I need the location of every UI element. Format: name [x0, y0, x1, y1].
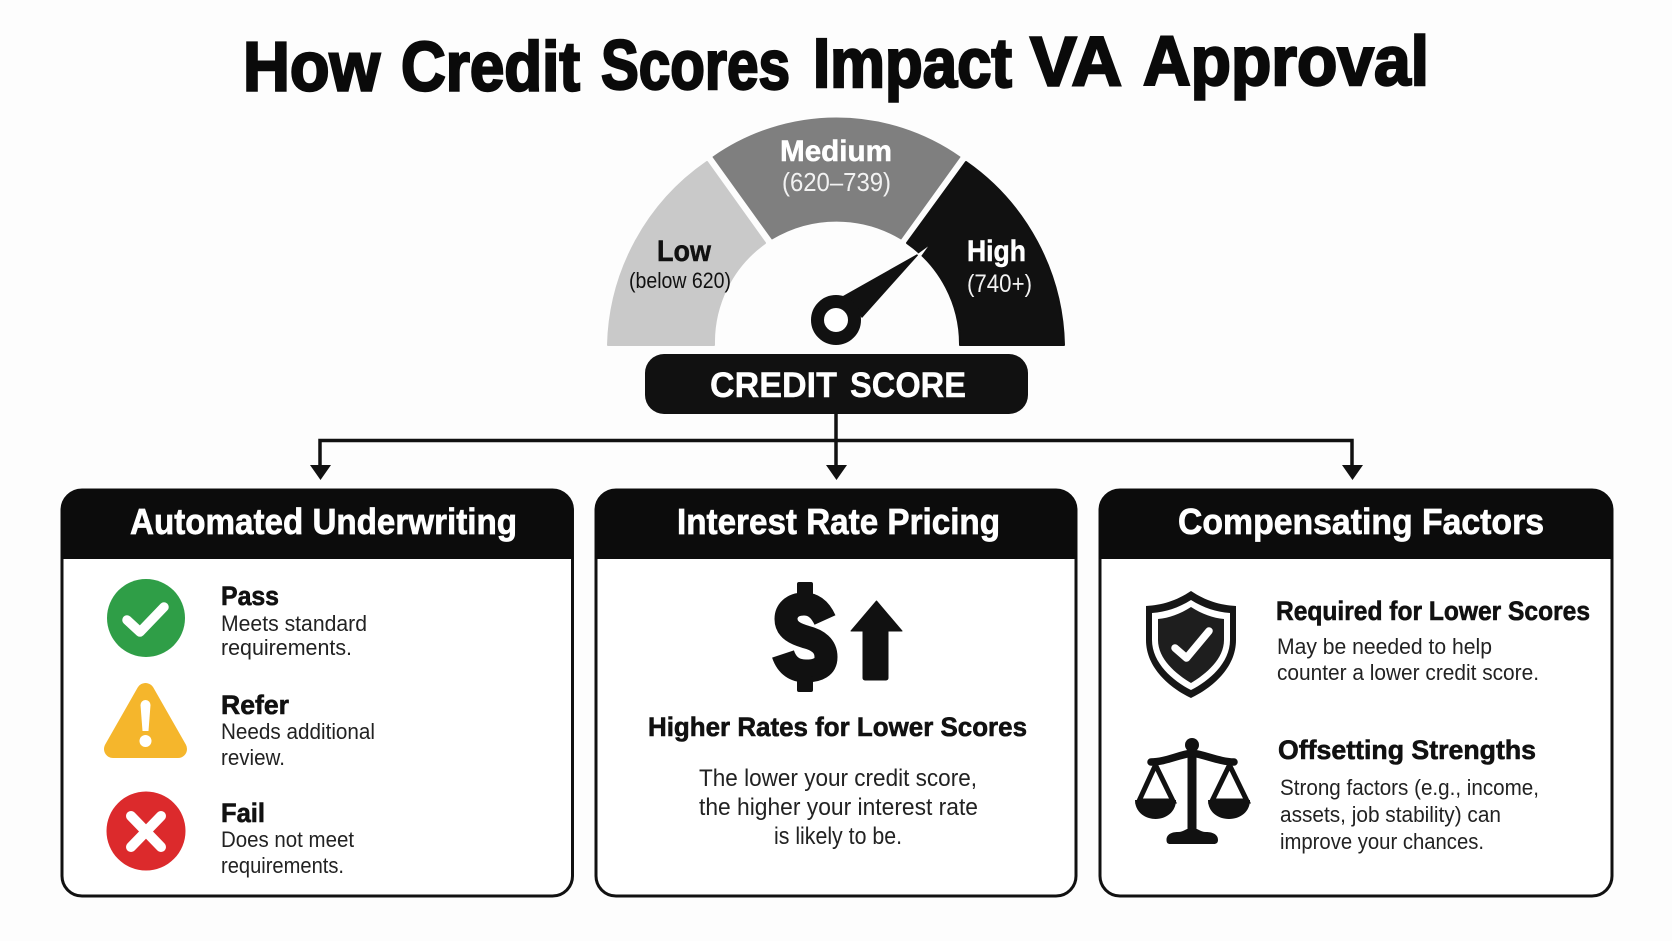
title	[243, 22, 1429, 106]
credit score label: SCORE	[850, 366, 966, 405]
text: fail: Does not meet	[221, 827, 354, 852]
panel: automated underwriting	[61, 489, 573, 896]
text: refer: Needs additional	[221, 719, 375, 744]
gauge needle	[818, 246, 928, 338]
text: offsetting strengths: Strong factors (e.g., income,	[1280, 775, 1539, 800]
gauge segment: low: Low	[657, 235, 712, 268]
title: VA	[1030, 22, 1122, 100]
text: required for lower scores: May be needed to help	[1277, 634, 1492, 659]
gauge segment: medium	[713, 118, 960, 239]
text: interest rate explanation: the higher your interest rate	[699, 794, 978, 821]
text: fail: requirements.	[221, 853, 344, 878]
text: offsetting strengths: improve your chances.	[1280, 829, 1484, 854]
text: required for lower scores: Required for Lower Scores	[1276, 596, 1590, 626]
credit score gauge	[608, 118, 1064, 345]
gauge segment: medium: Medium	[780, 135, 892, 168]
icon: dollar with up arrow	[783, 582, 902, 692]
header: automated underwriting: Automated Underwriting	[130, 501, 517, 542]
text: interest rate explanation	[699, 765, 978, 850]
connector arrows	[310, 414, 1363, 480]
header: compensating factors: Compensating Factors	[1178, 501, 1544, 542]
gauge segment: medium: (620–739)	[782, 167, 891, 197]
text: offsetting strengths	[1278, 735, 1539, 854]
title: How	[243, 28, 381, 106]
credit score label: CREDIT	[710, 366, 837, 405]
icon: refer warning	[113, 692, 178, 749]
text: fail	[221, 798, 354, 878]
text: required for lower scores: counter a lower credit score.	[1277, 660, 1539, 685]
panel: compensating factors	[1099, 489, 1613, 896]
text: interest rate explanation: is likely to be.	[774, 823, 902, 850]
header: compensating factors	[1099, 489, 1613, 559]
text: offsetting strengths: Offsetting Strengths	[1278, 735, 1536, 765]
title: Credit	[401, 28, 580, 106]
text: refer: review.	[221, 745, 285, 770]
text: pass	[221, 581, 367, 660]
text: pass: Meets standard	[221, 611, 367, 636]
icon: fail cross	[106, 792, 186, 870]
text: fail: Fail	[221, 798, 265, 828]
header: interest rate pricing: Interest Rate Pricing	[677, 501, 1000, 542]
gauge segment: high: High	[967, 235, 1026, 268]
text: interest rate explanation: The lower your credit score,	[699, 765, 977, 792]
gauge segment: low	[608, 162, 765, 345]
icon: balance scales	[1135, 738, 1250, 844]
gauge segment: low: (below 620)	[629, 268, 731, 293]
icon: shield with check	[1146, 591, 1236, 698]
title: Impact	[813, 24, 1012, 102]
header: interest rate pricing	[595, 489, 1077, 559]
text: pass: Pass	[221, 581, 279, 611]
text: offsetting strengths: assets, job stability) can	[1280, 802, 1501, 827]
icon: pass check	[107, 579, 185, 657]
panel: interest rate pricing	[595, 489, 1077, 896]
text: pass: requirements.	[221, 635, 352, 660]
gauge segment: high: (740+)	[967, 270, 1032, 298]
title: Scores	[601, 26, 790, 104]
title: Approval	[1143, 22, 1429, 100]
header: automated underwriting	[61, 489, 573, 559]
text: required for lower scores	[1276, 596, 1590, 685]
gauge segment: high	[907, 162, 1064, 345]
credit score label	[645, 354, 1028, 414]
text: refer	[221, 690, 375, 770]
subheading: higher rates: Higher Rates for Lower Scores	[648, 712, 1027, 742]
text: refer: Refer	[221, 690, 289, 720]
